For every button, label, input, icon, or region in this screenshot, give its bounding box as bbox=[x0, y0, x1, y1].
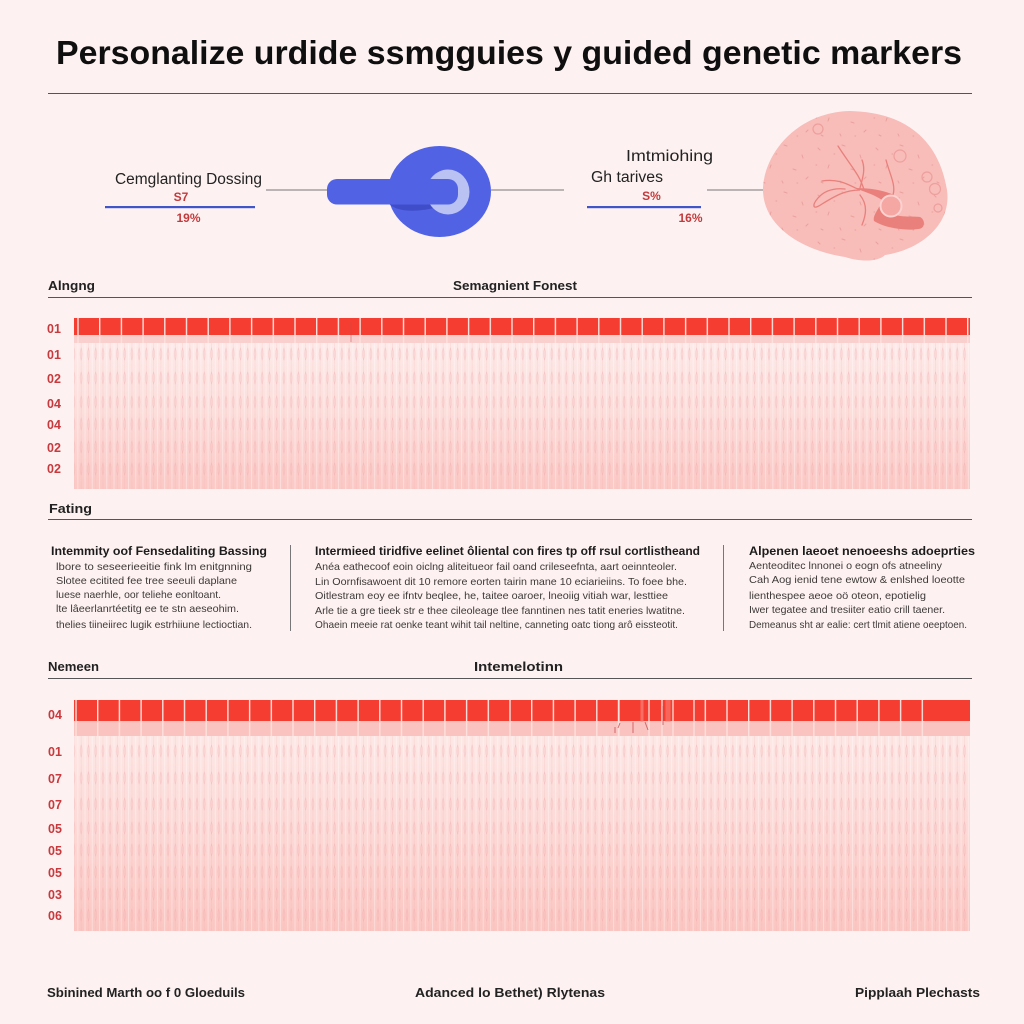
cell gaps bbox=[74, 700, 619, 736]
text block: middle: Anéa eathecoof eoin oiclng aliteitueor fail oand crileseefnta, aart oeinnteoler. bbox=[315, 561, 677, 573]
irregular cells bbox=[619, 700, 694, 736]
row labels: first chart bbox=[47, 322, 61, 476]
chart: second heat grid bbox=[74, 700, 970, 931]
footer: left: Sbinined Marth oo f 0 Gloeduils bbox=[47, 986, 245, 1000]
bar: dosing bbox=[105, 206, 255, 208]
row labels: second chart: 05 bbox=[48, 866, 62, 880]
section heading: text: Fating bbox=[49, 501, 92, 516]
value: bottom: 19% bbox=[176, 211, 201, 225]
wave rows bbox=[74, 346, 970, 477]
icon: organ illustration bbox=[760, 108, 952, 263]
band under header bbox=[74, 721, 970, 736]
row labels: second chart: 05 bbox=[48, 844, 62, 858]
row labels: first chart: 04 bbox=[47, 418, 61, 432]
row labels: first chart: 01 bbox=[47, 348, 61, 362]
row labels: second chart: 05 bbox=[48, 822, 62, 836]
marks bbox=[615, 706, 663, 733]
text block: right: Demeanus sht ar ealie: cert tlmit atiene oeeptoen. bbox=[749, 619, 967, 631]
text block: middle: Ohaein meeie rat oenke teant wihit tail neltine, canneting oatc tiong arô eissteotit. bbox=[315, 619, 678, 631]
row labels: second chart: 07 bbox=[48, 798, 62, 812]
text block: right: lienthespee aeoe oö oteon, epotielig bbox=[749, 590, 926, 602]
cell gaps bbox=[74, 318, 970, 343]
text block: right bbox=[749, 544, 975, 631]
row labels: first chart: 02 bbox=[47, 462, 61, 476]
panel: intermittent bbox=[587, 108, 952, 263]
text block: left: Slotee ecitited fee tree seeuli daplane bbox=[56, 575, 237, 587]
value: bottom: 16% bbox=[678, 211, 703, 225]
text block: left: thelies tiineiirec lugik estrhiiune lectioctian. bbox=[56, 619, 252, 631]
text block: middle: Intermieed tiridfive eelinet ôliental con fires tp off rsul cortlistheand bbox=[315, 544, 700, 558]
row labels: second chart: 01 bbox=[48, 745, 62, 759]
connector bbox=[707, 189, 763, 191]
red header row bbox=[74, 318, 970, 335]
text block: middle: Lin Oornfisawoent dit 10 remore eorten tairin mane 10 eciarieiins. To foee bhe. bbox=[315, 576, 687, 588]
chart body bbox=[74, 721, 970, 931]
row labels: second chart bbox=[48, 708, 62, 923]
value: top: S7 bbox=[174, 190, 189, 204]
column lines bbox=[74, 736, 970, 931]
connector bbox=[266, 189, 564, 191]
text block: right: Iwer tegatee and tresiiter eatio crill taener. bbox=[749, 604, 945, 616]
text block: middle bbox=[315, 544, 700, 631]
text block: left: lbore to seseerieeitie fink lm enitgnning bbox=[56, 561, 252, 573]
label: dosing: Cemglanting Dossing bbox=[115, 171, 262, 188]
red header row bbox=[74, 700, 970, 721]
divider bbox=[723, 545, 724, 631]
title: Personalize urdide ssmgguies y guided genetic markers bbox=[56, 34, 962, 71]
section heading: second chart: Intemelotinn bbox=[474, 659, 563, 674]
section heading: first chart: Semagnient Fonest bbox=[453, 278, 578, 293]
footer: centre: Adanced lo Bethet) Rlytenas bbox=[415, 986, 605, 1000]
section heading: second chart bbox=[48, 659, 972, 679]
band under header bbox=[74, 335, 970, 343]
mark bbox=[350, 322, 352, 342]
bar: intermittent bbox=[587, 206, 701, 208]
text block: left: Intemmity oof Fensedaliting Bassing bbox=[51, 544, 267, 558]
row labels: second chart: 04 bbox=[48, 708, 62, 722]
text block: middle: Oitlestram eoy ee ifntv beqlee, he, taitee oaroer, lneoiig vitiah war, lesttiee bbox=[315, 590, 668, 602]
section heading: first chart: Alngng bbox=[48, 278, 95, 293]
text block: left: lte lâeerlanrtéetitg ee te stn aeseohim. bbox=[56, 603, 239, 615]
text block: right: Cah Aog ienid tene ewtow & enlshed loeotte bbox=[749, 574, 965, 586]
section heading: second chart: Nemeen bbox=[48, 659, 99, 674]
text block: middle: Arle tie a gre tieek str e thee cileoleage tlee fanntinen nes tatit eneries lwatitne. bbox=[315, 605, 685, 617]
text block: right: Alpenen laeoet nenoeeshs adoeprties bbox=[749, 544, 975, 558]
section heading: first chart bbox=[48, 278, 972, 298]
row labels: first chart: 04 bbox=[47, 397, 61, 411]
text block: left bbox=[51, 544, 267, 631]
row labels: first chart: 02 bbox=[47, 372, 61, 386]
row labels: second chart: 07 bbox=[48, 772, 62, 786]
label: intermittent: Imtmiohing bbox=[626, 148, 713, 165]
row labels: second chart: 06 bbox=[48, 909, 62, 923]
row labels: second chart: 03 bbox=[48, 888, 62, 902]
value: top: S% bbox=[642, 189, 661, 203]
column lines bbox=[74, 343, 970, 489]
chart body bbox=[74, 335, 970, 489]
wave rows bbox=[74, 743, 970, 923]
icon: blue capsule bbox=[327, 146, 491, 237]
chart: first heat grid bbox=[74, 318, 970, 489]
footer: right: Pipplaah Plechasts bbox=[855, 986, 980, 1000]
row labels: first chart: 01 bbox=[47, 322, 61, 336]
text block: left: luese naerhle, oor teliehe eonltoant. bbox=[56, 589, 221, 601]
panel: constant dosing bbox=[105, 146, 564, 237]
divider bbox=[290, 545, 291, 631]
text block: right: Aenteoditec lnnonei o eogn ofs atneeliny bbox=[749, 560, 943, 572]
label: second line: Gh tarives bbox=[591, 169, 663, 186]
row labels: first chart: 02 bbox=[47, 441, 61, 455]
